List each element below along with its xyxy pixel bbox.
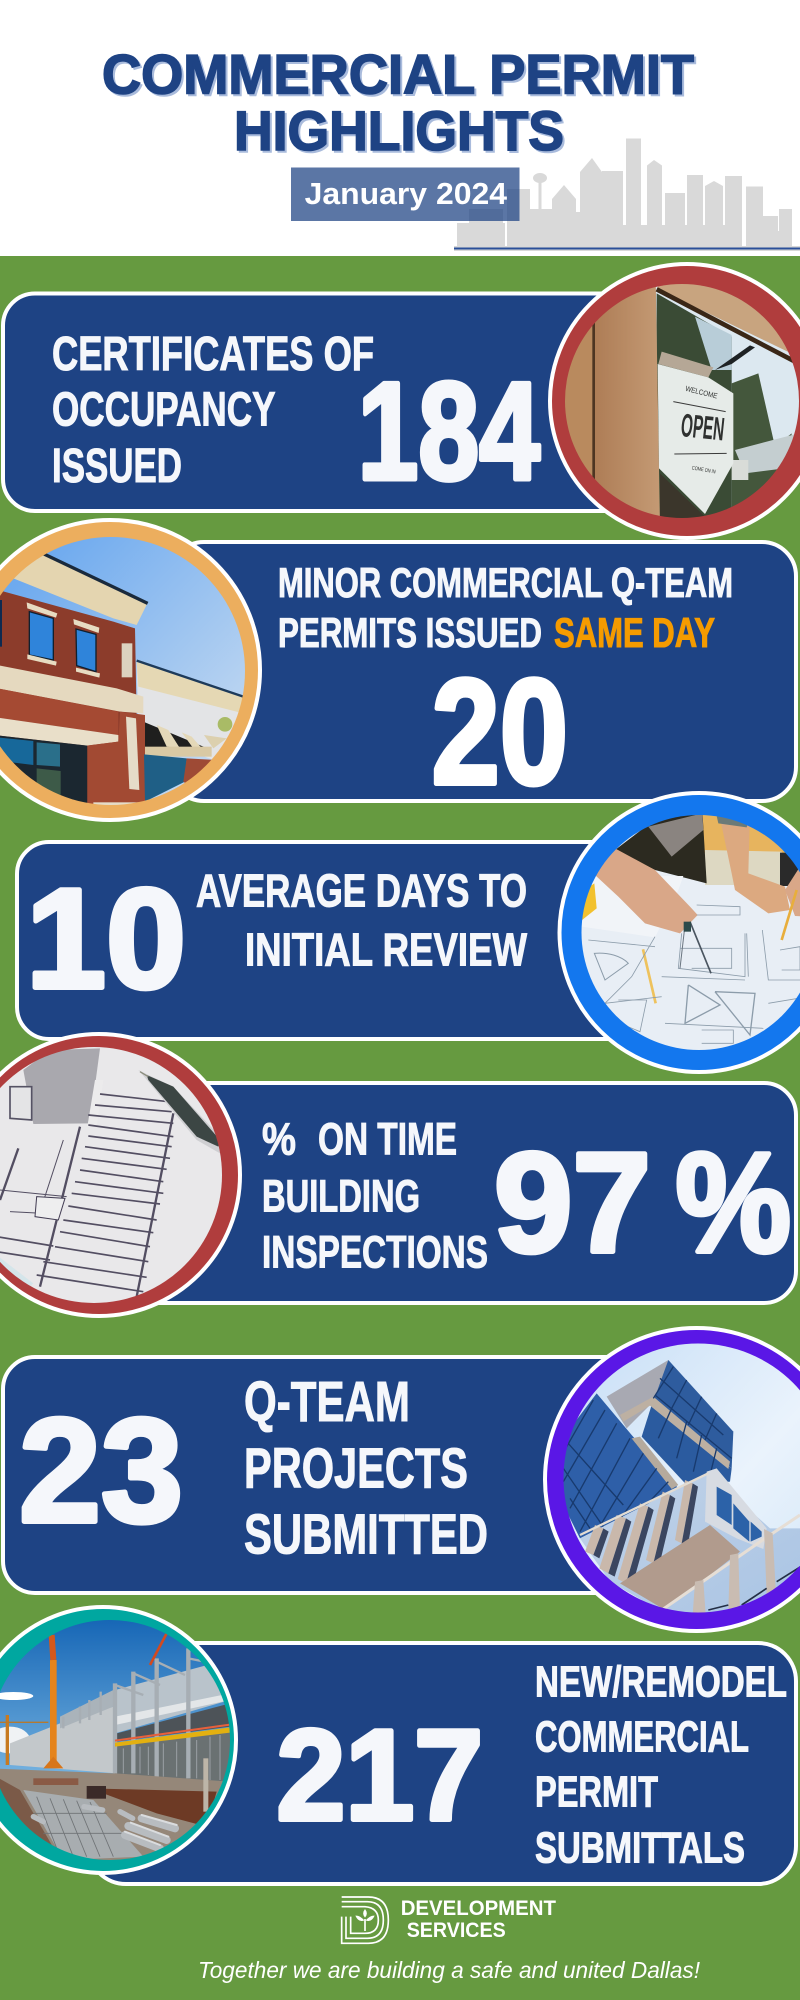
number bbox=[494, 1124, 791, 1282]
panel: average days to initial review bbox=[17, 793, 800, 1072]
photo: construction site bbox=[0, 1607, 243, 1877]
panel: certificates of occupancy bbox=[3, 264, 800, 538]
panel: new/remodel commercial permit submittals bbox=[0, 1607, 796, 1884]
card background bbox=[100, 1083, 796, 1303]
label text bbox=[262, 1114, 488, 1278]
photo: brick storefront bbox=[0, 520, 260, 820]
logo text bbox=[401, 1897, 556, 1942]
photo: open sign: OPEN bbox=[679, 406, 726, 447]
logo text: SERVICES bbox=[407, 1919, 506, 1942]
card background bbox=[3, 294, 723, 511]
label text: CERTIFICATES OF bbox=[52, 327, 374, 381]
number: 23 bbox=[19, 1388, 183, 1554]
title: HIGHLIGHTS bbox=[234, 100, 564, 162]
number: 10 bbox=[26, 860, 186, 1018]
skyline illustration bbox=[454, 138, 800, 251]
card background bbox=[88, 1643, 796, 1884]
label text: INITIAL REVIEW bbox=[245, 924, 527, 976]
label text: OCCUPANCY bbox=[52, 382, 276, 436]
date badge bbox=[291, 168, 520, 221]
label text bbox=[278, 559, 733, 656]
title: COMMERCIAL PERMIT bbox=[102, 44, 694, 106]
label text: PROJECTS bbox=[244, 1436, 468, 1500]
label text: % bbox=[262, 1114, 296, 1164]
label text: SAME DAY bbox=[554, 609, 715, 656]
label text bbox=[535, 1658, 787, 1872]
panel: on time building inspections bbox=[0, 1034, 796, 1316]
number: % bbox=[676, 1124, 791, 1282]
panel: q-team projects submitted bbox=[3, 1328, 800, 1631]
label text bbox=[244, 1370, 488, 1566]
label text bbox=[52, 327, 374, 493]
label text: ON TIME bbox=[318, 1114, 457, 1164]
number: 20 bbox=[432, 648, 568, 816]
card background bbox=[170, 542, 796, 801]
photo: open sign: WELCOME bbox=[685, 384, 718, 401]
label text: Q-TEAM bbox=[244, 1370, 410, 1434]
number: 184 bbox=[358, 354, 540, 509]
date badge: January 2024 bbox=[305, 176, 508, 211]
photo: open sign bbox=[550, 264, 800, 538]
photo: floor plan and pen bbox=[0, 1034, 247, 1316]
label text: INSPECTIONS bbox=[262, 1226, 488, 1278]
photo: glass tower bbox=[545, 1328, 800, 1631]
logo text: DEVELOPMENT bbox=[401, 1897, 556, 1920]
photo: hands on blueprints bbox=[560, 793, 800, 1072]
title bbox=[102, 44, 694, 162]
label text: AVERAGE DAYS TO bbox=[196, 864, 527, 916]
number: 97 bbox=[494, 1124, 651, 1282]
card background bbox=[3, 1357, 723, 1593]
photo: open sign: COME ON IN bbox=[691, 465, 716, 475]
label text: SUBMITTED bbox=[244, 1502, 488, 1566]
tagline: Together we are building a safe and united Dallas! bbox=[198, 1957, 700, 1983]
header background bbox=[0, 0, 800, 256]
label text: BUILDING bbox=[262, 1170, 420, 1222]
icon: D mark bbox=[342, 1897, 388, 1943]
logo: development services bbox=[342, 1897, 556, 1943]
card background bbox=[17, 842, 717, 1039]
label text: PERMITS ISSUED bbox=[278, 609, 542, 656]
label text: PERMIT bbox=[535, 1768, 658, 1816]
number: 217 bbox=[276, 1704, 483, 1848]
panel: minor commercial q-team permits bbox=[0, 520, 796, 820]
label text bbox=[196, 864, 527, 976]
label text: ISSUED bbox=[52, 439, 182, 493]
